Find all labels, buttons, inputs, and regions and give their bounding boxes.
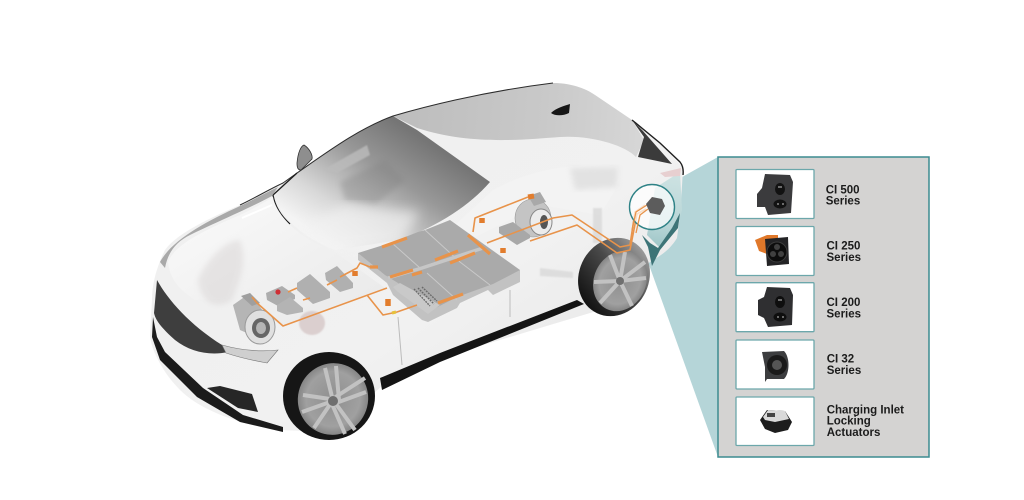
label: CI 250 xyxy=(826,241,860,253)
red mark xyxy=(275,289,281,295)
rear teal tint xyxy=(647,172,682,248)
wiper highlight xyxy=(242,205,272,218)
lower intake xyxy=(207,386,258,412)
antenna xyxy=(551,104,570,115)
converter box xyxy=(325,266,353,292)
icon: CI 500 connector xyxy=(757,174,793,215)
motor ring xyxy=(245,310,275,344)
motor top box xyxy=(528,192,546,206)
tire xyxy=(283,352,375,440)
inlet xyxy=(646,197,665,215)
motor connector xyxy=(528,196,534,197)
label: CI 200 xyxy=(826,297,860,309)
spokes xyxy=(302,366,366,434)
rim xyxy=(583,242,657,320)
panel background xyxy=(718,157,929,457)
label: Series xyxy=(826,308,861,320)
rear motor cable xyxy=(473,197,528,232)
orange wiring xyxy=(252,196,646,326)
rear wheel xyxy=(565,226,663,328)
front wheel xyxy=(283,352,380,446)
box xyxy=(736,340,814,389)
item: Charging Inlet Locking Actuators xyxy=(736,397,904,446)
hood xyxy=(168,197,385,325)
callout wedge xyxy=(648,157,718,457)
label: Series xyxy=(826,196,860,208)
roof xyxy=(393,83,644,157)
cables in circle xyxy=(632,205,648,233)
item: CI 250 xyxy=(736,226,861,276)
control module xyxy=(393,283,440,314)
label: Series xyxy=(827,365,861,377)
battery top xyxy=(358,220,520,312)
grille xyxy=(154,280,228,354)
centre tube xyxy=(388,248,483,278)
headlight xyxy=(222,345,278,363)
dashboard fade xyxy=(300,205,420,252)
ghost rear seat xyxy=(540,208,602,278)
inlet magnifier xyxy=(630,184,674,233)
rear motor xyxy=(515,199,551,237)
icon: CI 200 connector xyxy=(758,287,793,327)
mirror xyxy=(297,145,312,170)
relays xyxy=(355,218,503,306)
rear box xyxy=(499,222,530,245)
item: CI 200 xyxy=(736,283,861,332)
box xyxy=(736,170,814,218)
yellow clip xyxy=(392,312,396,313)
hub xyxy=(616,277,624,285)
snow box xyxy=(277,297,303,315)
circle xyxy=(630,184,674,230)
door lines xyxy=(398,290,510,365)
item: CI 500 xyxy=(736,170,860,218)
tire xyxy=(565,226,663,328)
motor bore xyxy=(252,318,270,338)
rear lower cable xyxy=(530,209,646,253)
label: Series xyxy=(826,252,861,264)
battery side xyxy=(358,253,520,322)
box xyxy=(736,283,814,332)
rear motor ring xyxy=(530,209,552,235)
car illustration xyxy=(150,83,683,446)
red box xyxy=(266,286,295,306)
inverter box xyxy=(297,274,330,304)
side window xyxy=(455,165,620,240)
front components xyxy=(233,266,353,344)
label: CI 500 xyxy=(826,184,860,196)
label: Actuators xyxy=(827,427,880,439)
interior shade xyxy=(340,160,405,205)
hood edge shade xyxy=(160,187,278,268)
rim xyxy=(286,352,380,446)
rear dark band xyxy=(642,213,680,266)
rear light xyxy=(632,120,672,164)
icon: actuator xyxy=(760,410,792,433)
windshield xyxy=(273,116,490,250)
panel: product list xyxy=(718,157,929,457)
box xyxy=(736,397,814,446)
car body xyxy=(150,83,683,432)
lower cable xyxy=(367,295,417,315)
rear upper cable xyxy=(487,205,645,247)
main front cable xyxy=(252,288,387,326)
label: Charging Inlet xyxy=(827,404,904,416)
tail reflector xyxy=(660,168,681,177)
label: CI 32 xyxy=(827,354,854,366)
roof outline xyxy=(240,83,553,205)
rear motor bore xyxy=(540,215,548,229)
rear components xyxy=(499,192,552,245)
battery bus bars xyxy=(370,235,490,303)
small harness xyxy=(288,263,370,300)
window shade xyxy=(570,167,618,190)
icon: CI 32 connector xyxy=(762,351,788,382)
front motor xyxy=(233,293,268,338)
hub xyxy=(328,396,338,406)
ghost spring xyxy=(299,311,325,335)
item: CI 32 xyxy=(736,340,861,389)
spokes xyxy=(594,252,646,306)
cell seams xyxy=(392,230,490,300)
ghost engine xyxy=(198,240,243,305)
box xyxy=(736,226,814,276)
front lip xyxy=(152,317,283,432)
motor core xyxy=(256,322,266,334)
rear outline xyxy=(632,120,683,175)
interior band xyxy=(323,145,370,173)
motor top box xyxy=(241,293,260,306)
icon: CI 250 connector xyxy=(755,235,789,266)
battery pack xyxy=(358,220,520,322)
label: Locking xyxy=(827,416,871,428)
side sill xyxy=(380,300,584,390)
windshield edge xyxy=(273,173,297,224)
module ribs xyxy=(414,287,437,306)
